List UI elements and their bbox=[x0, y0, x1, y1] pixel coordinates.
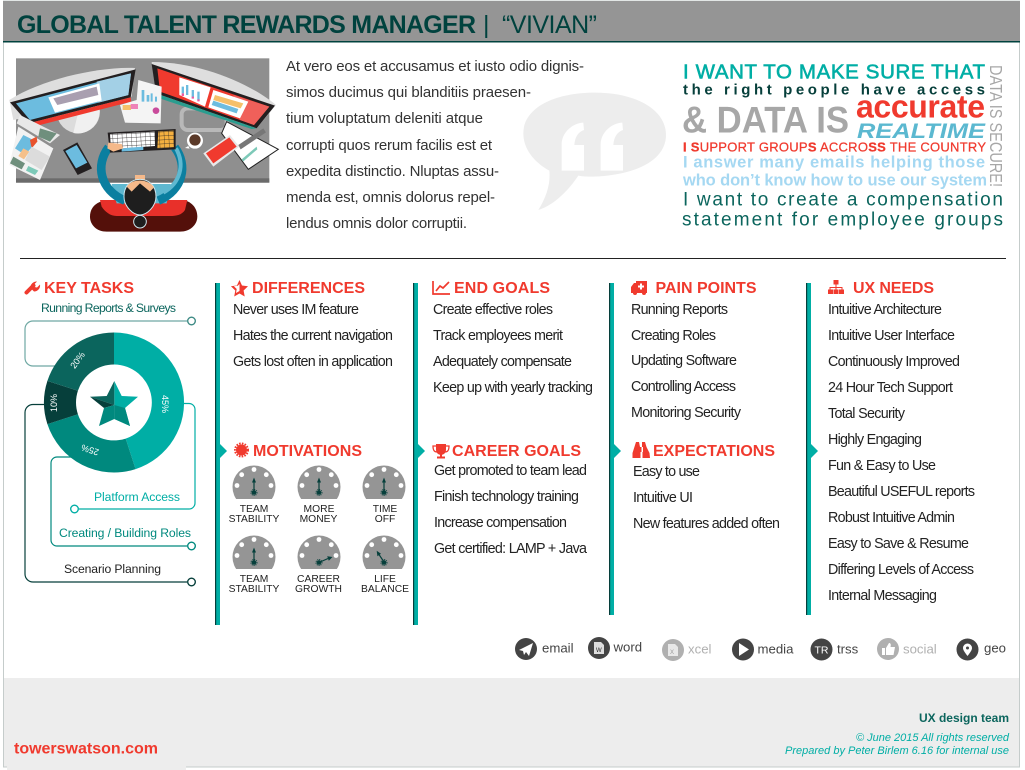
icon: line chart bbox=[433, 281, 450, 294]
legend: word: W bbox=[596, 648, 602, 654]
donut chart: 25% bbox=[80, 442, 100, 457]
icon: star outline bbox=[231, 280, 248, 296]
list: Updating Software bbox=[631, 353, 737, 369]
gauges: TEAM bbox=[240, 574, 268, 585]
footer link: towerswatson.com bbox=[14, 740, 158, 758]
intro paragraph: At vero eos et accusamus et iusto odio dignis- bbox=[286, 58, 584, 75]
panel: pain points bbox=[631, 280, 757, 421]
list: Create effective roles bbox=[433, 302, 553, 318]
gauges: TIME bbox=[373, 504, 397, 515]
list: Intuitive User Interface bbox=[828, 328, 955, 344]
intro paragraph: tium voluptatum deleniti atque bbox=[286, 110, 483, 127]
panel: key tasks bbox=[25, 280, 195, 586]
word cloud quote: & DATA IS bbox=[682, 100, 849, 140]
gauges: MORE bbox=[304, 504, 335, 515]
panel: expectations bbox=[632, 442, 780, 532]
word cloud quote: I answer many emails helping those bbox=[683, 154, 985, 172]
legend: xcel: xcel bbox=[688, 642, 712, 656]
panel: end goals bbox=[433, 280, 593, 396]
word cloud quote: accurate bbox=[856, 88, 985, 124]
list: Internal Messaging bbox=[828, 588, 937, 604]
legend: word bbox=[588, 637, 642, 659]
legend icons bbox=[515, 637, 1006, 661]
chart labels: Platform Access bbox=[94, 490, 180, 504]
heading: MOTIVATIONS bbox=[253, 443, 362, 460]
icon: star bbox=[90, 381, 138, 426]
legend: trss: trss bbox=[837, 642, 859, 656]
chart labels: Running Reports & Surveys bbox=[41, 301, 176, 315]
list: Differing Levels of Access bbox=[828, 562, 974, 578]
heading: EXPECTATIONS bbox=[653, 443, 775, 460]
legend: social: social bbox=[903, 642, 937, 656]
word cloud quote bbox=[682, 60, 1006, 230]
icon: quote speech bubble bbox=[523, 93, 666, 210]
list: 24 Hour Tech Support bbox=[828, 380, 953, 396]
icon: binoculars bbox=[632, 442, 650, 458]
list: Get certified: LAMP + Java bbox=[434, 541, 587, 557]
copyright: Prepared by Peter Birlem 6.16 for internal use bbox=[785, 745, 1009, 757]
donut chart: 20% bbox=[68, 350, 87, 370]
word cloud quote: I want to create a compensation bbox=[683, 190, 1003, 210]
word cloud quote: statement for employee groups bbox=[682, 210, 1003, 230]
gauges: LIFE bbox=[374, 574, 396, 585]
chart labels bbox=[41, 301, 191, 576]
list bbox=[828, 302, 975, 604]
legend: email bbox=[515, 638, 574, 660]
list: Total Security bbox=[828, 406, 906, 422]
gauges: MONEY bbox=[300, 514, 338, 525]
list: Finish technology training bbox=[434, 489, 579, 505]
gauges: OFF bbox=[375, 514, 395, 525]
legend: xcel bbox=[662, 639, 712, 661]
intro paragraph: expedita distinctio. Nluptas assu- bbox=[286, 163, 499, 180]
donut chart bbox=[44, 332, 184, 473]
header bar bbox=[3, 1, 1020, 42]
intro paragraph: corrupti quos rerum facilis est et bbox=[286, 137, 493, 154]
panel: differences bbox=[231, 280, 393, 370]
list: Easy to use bbox=[633, 464, 700, 480]
word cloud quote: REALTIME bbox=[857, 120, 986, 143]
legend: geo: geo bbox=[984, 640, 1006, 656]
panel: ux needs bbox=[828, 280, 975, 604]
panel: motivations bbox=[229, 443, 409, 595]
list bbox=[233, 302, 393, 370]
list: Never uses IM feature bbox=[233, 302, 359, 318]
legend: media bbox=[732, 638, 794, 660]
list: Monitoring Security bbox=[631, 405, 742, 421]
list: Beautiful USEFUL reports bbox=[828, 484, 975, 500]
list: Increase compensation bbox=[434, 515, 567, 531]
intro paragraph: lendus omnis dolor corruptii. bbox=[286, 215, 467, 232]
list bbox=[631, 302, 742, 421]
gauges: TEAM bbox=[240, 504, 268, 515]
list: Adequately compensate bbox=[433, 354, 572, 370]
heading: PAIN POINTS bbox=[656, 280, 757, 297]
word cloud quote: who don’t know how to use our system bbox=[682, 172, 987, 190]
list: Get promoted to team lead bbox=[434, 463, 587, 479]
list: Easy to Save & Resume bbox=[828, 536, 969, 552]
vertical secure label: DATA IS SECURE! bbox=[986, 65, 1006, 187]
icon: badge bbox=[235, 444, 248, 456]
list: New features added often bbox=[633, 516, 780, 532]
heading: UX NEEDS bbox=[853, 280, 934, 297]
chart labels: Scenario Planning bbox=[64, 562, 161, 576]
icon: org chart bbox=[828, 280, 844, 294]
list bbox=[633, 464, 780, 532]
donut chart: 45% bbox=[160, 395, 170, 413]
copyright bbox=[785, 732, 1010, 757]
heading: DIFFERENCES bbox=[252, 280, 365, 297]
gauges: STABILITY bbox=[229, 514, 279, 525]
list: Running Reports bbox=[631, 302, 728, 318]
donut chart: 10% bbox=[49, 394, 59, 412]
list: Fun & Easy to Use bbox=[828, 458, 936, 474]
list: Robust Intuitive Admin bbox=[828, 510, 955, 526]
list: Track employees merit bbox=[433, 328, 563, 344]
footer bbox=[4, 678, 1019, 770]
team credit: UX design team bbox=[919, 711, 1009, 725]
connector lines bbox=[25, 317, 195, 586]
intro paragraph bbox=[286, 58, 584, 232]
legend: media: media bbox=[758, 642, 794, 656]
legend: email: email bbox=[542, 640, 574, 656]
chart labels: Creating / Building Roles bbox=[59, 526, 191, 540]
list bbox=[433, 302, 593, 396]
list bbox=[434, 463, 587, 557]
legend: xcel: X bbox=[670, 650, 674, 656]
heading: KEY TASKS bbox=[44, 280, 134, 297]
list: Continuously Improved bbox=[828, 354, 960, 370]
word cloud quote: I WANT TO MAKE SURE THAT bbox=[683, 60, 985, 84]
word cloud quote: I SUPPORT GROUPS ACCROSS THE COUNTRY bbox=[683, 140, 986, 154]
gauges: BALANCE bbox=[361, 584, 409, 595]
list: Hates the current navigation bbox=[233, 328, 393, 344]
heading: END GOALS bbox=[454, 280, 550, 297]
gauges: STABILITY bbox=[229, 584, 279, 595]
gauges: CAREER bbox=[297, 574, 340, 585]
title: GLOBAL TALENT REWARDS MANAGER bbox=[17, 11, 476, 39]
legend: trss: TR bbox=[814, 644, 829, 656]
intro paragraph: simos ducimus qui blanditiis praesen- bbox=[286, 84, 531, 101]
legend: trss bbox=[810, 638, 859, 660]
list: Highly Engaging bbox=[828, 432, 922, 448]
copyright: © June 2015 All rights reserved bbox=[856, 732, 1010, 744]
title separator: | bbox=[483, 11, 490, 39]
persona name: “VIVIAN” bbox=[502, 11, 597, 39]
gauges: GROWTH bbox=[295, 584, 342, 595]
column dividers with arrows bbox=[215, 283, 818, 625]
list: Creating Roles bbox=[631, 328, 716, 344]
icon: ambulance bbox=[631, 281, 647, 295]
heading: CAREER GOALS bbox=[452, 443, 581, 460]
list: Keep up with yearly tracking bbox=[433, 380, 593, 396]
icon: trophy bbox=[433, 444, 449, 458]
legend: geo bbox=[956, 638, 1006, 660]
legend: word: word bbox=[612, 640, 642, 654]
list: Intuitive UI bbox=[633, 490, 693, 506]
list: Gets lost often in application bbox=[233, 354, 393, 370]
intro paragraph: menda est, omnis dolorus repel- bbox=[286, 189, 495, 206]
illustration: person at desk with two monitors bbox=[9, 58, 278, 232]
panel: career goals bbox=[433, 443, 587, 557]
list: Controlling Access bbox=[631, 379, 736, 395]
icon: wrench bbox=[26, 281, 40, 292]
gauges bbox=[229, 466, 409, 595]
legend: social bbox=[877, 638, 937, 660]
word cloud quote: the right people have access bbox=[683, 82, 985, 98]
list: Intuitive Architecture bbox=[828, 302, 942, 318]
